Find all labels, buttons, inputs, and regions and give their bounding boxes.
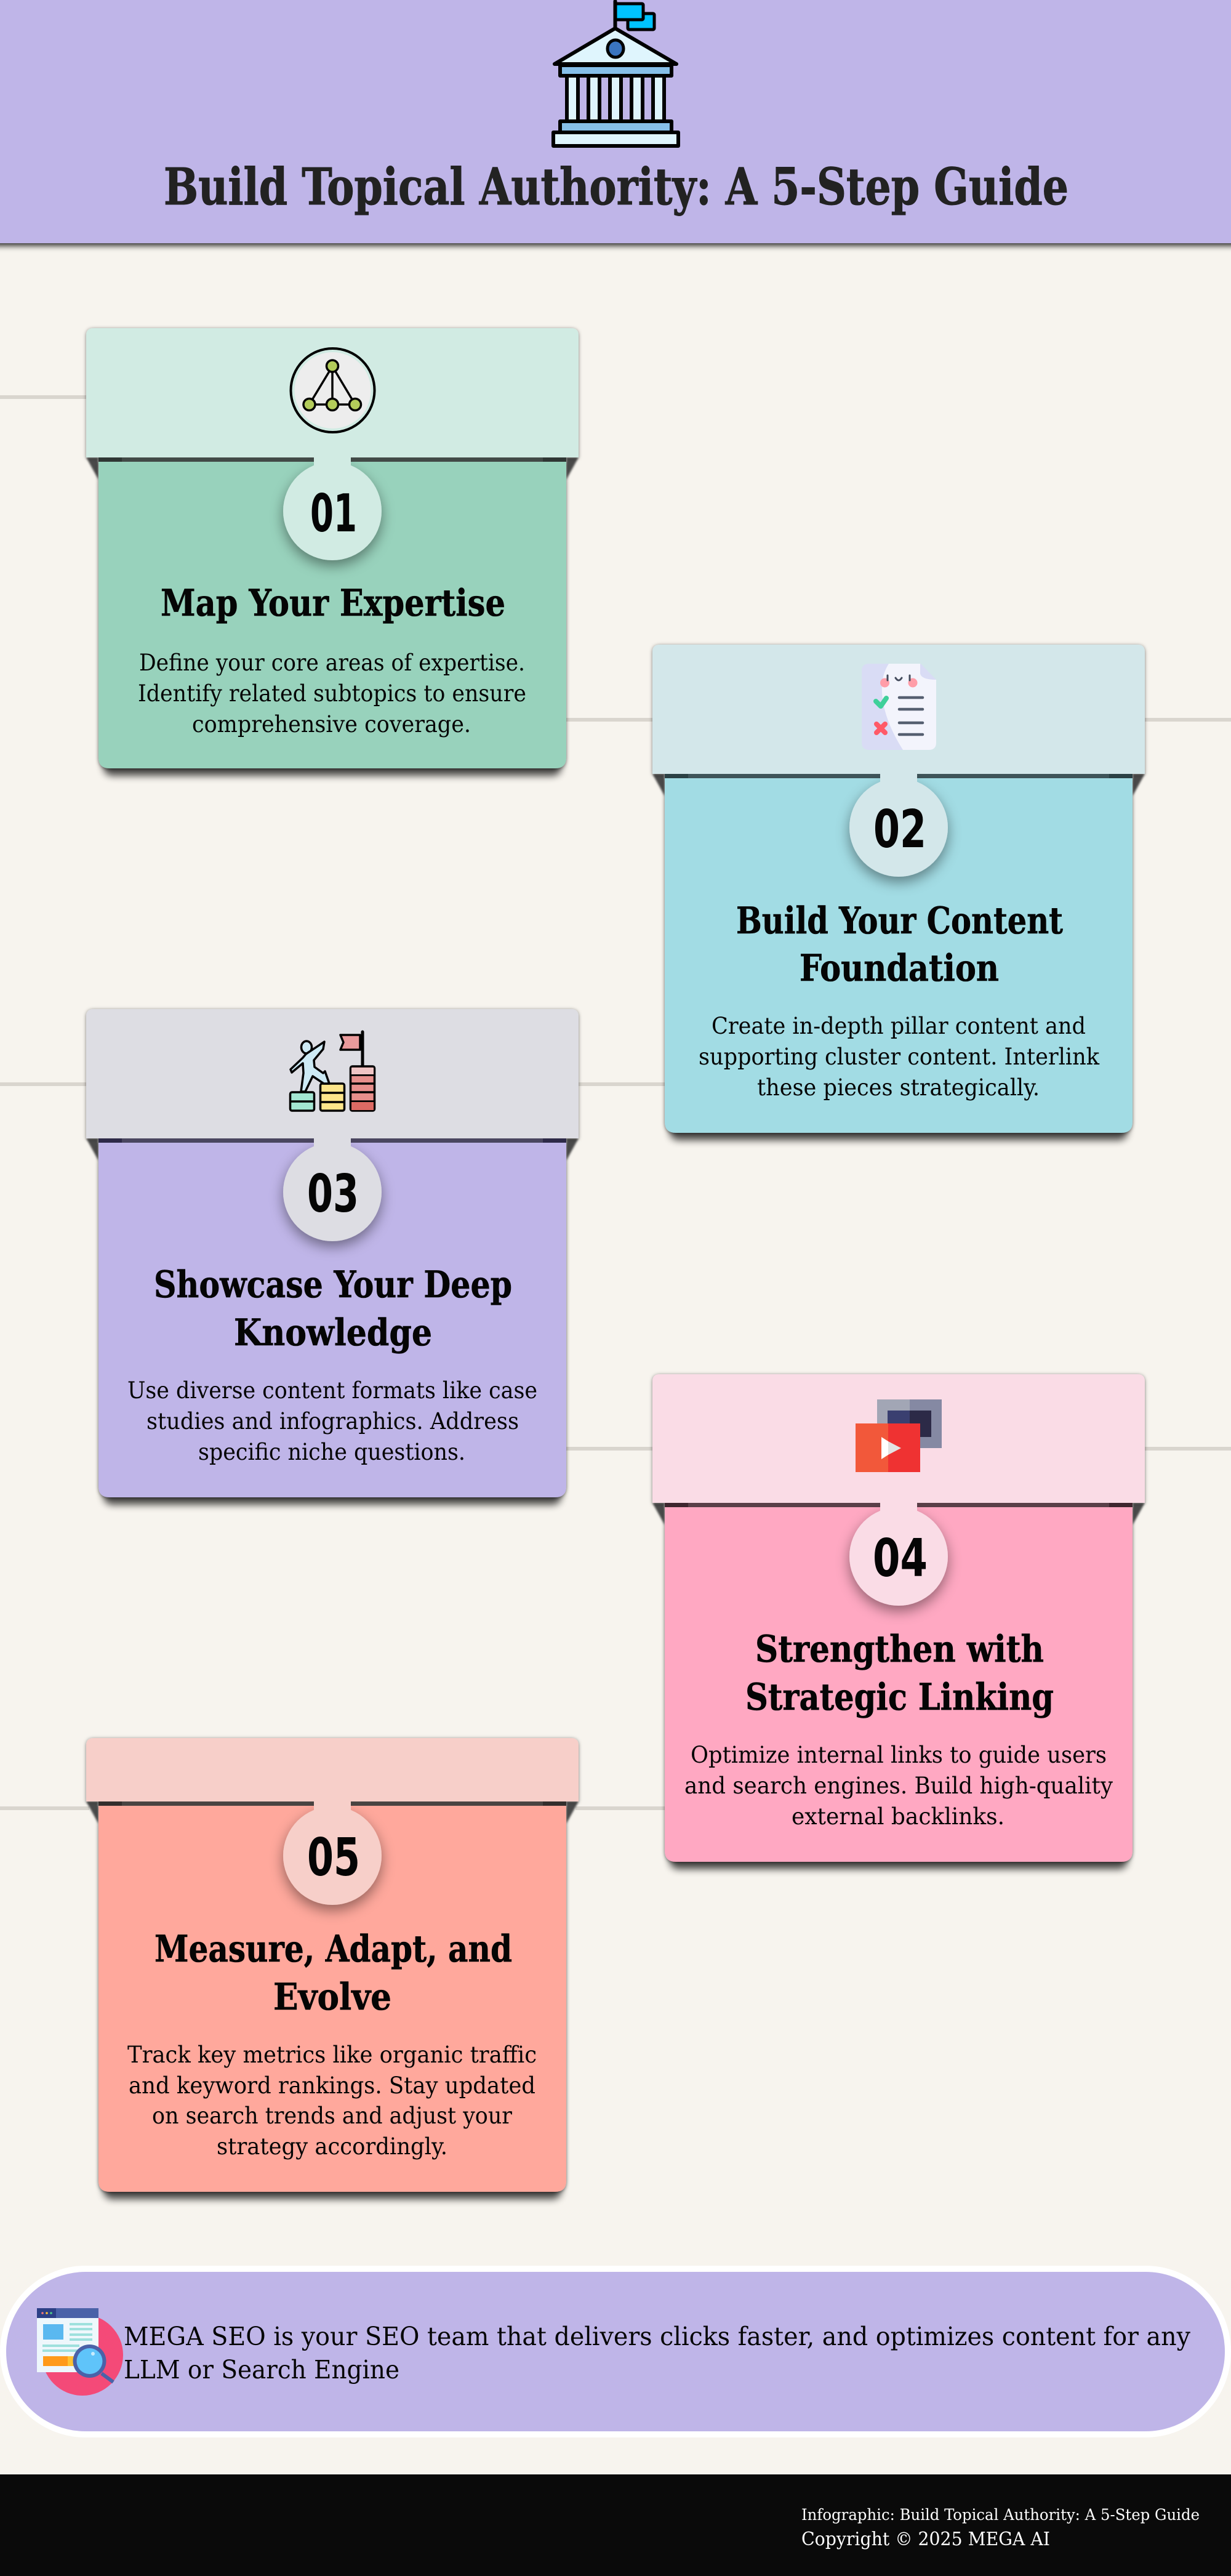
number badge 05: 05 bbox=[307, 1827, 360, 1888]
step 04 description: external backlinks. bbox=[792, 1803, 1004, 1830]
icon: network nodes bbox=[291, 348, 374, 432]
footer caption: Infographic: Build Topical Authority: A 5-Step Guide bbox=[801, 2506, 1200, 2524]
step 02 description bbox=[699, 1013, 1100, 1101]
panel: step 01 bbox=[86, 328, 579, 776]
step 05 description: on search trends and adjust your bbox=[152, 2103, 512, 2129]
title: Build Topical Authority: A 5-Step Guide bbox=[164, 158, 1069, 217]
step 04 header tab bbox=[652, 1374, 1145, 1503]
step 04 description: and search engines. Build high-quality bbox=[684, 1773, 1113, 1799]
icon: web page with magnifier bbox=[37, 2308, 123, 2396]
panel: step 02 bbox=[652, 645, 1145, 1140]
icon: checklist document bbox=[862, 664, 936, 750]
step 04 body bbox=[665, 1507, 1133, 1862]
step 05 description: strategy accordingly. bbox=[217, 2133, 447, 2160]
panel: step 04 bbox=[652, 1374, 1145, 1869]
step 03 body bbox=[98, 1143, 566, 1497]
step 04 heading bbox=[745, 1628, 1054, 1719]
number badge 04 bbox=[849, 1498, 948, 1606]
step 01 description: comprehensive coverage. bbox=[192, 711, 471, 738]
footer bar bbox=[0, 2474, 1231, 2576]
step 01 description bbox=[138, 650, 526, 738]
step 02 header tab bbox=[652, 645, 1145, 774]
call to action banner bbox=[3, 2269, 1228, 2434]
icon: video play cards bbox=[856, 1399, 942, 1472]
panel: step 03 bbox=[86, 1009, 579, 1505]
call to action text: MEGA SEO is your SEO team that delivers clicks faster, and optimizes content for any bbox=[124, 2322, 1190, 2351]
number badge 04: 04 bbox=[873, 1528, 928, 1589]
step 03 heading: Showcase Your Deep bbox=[154, 1263, 512, 1306]
header banner bbox=[0, 0, 1231, 243]
step 03 description: Use diverse content formats like case bbox=[127, 1377, 537, 1404]
step 05 description bbox=[127, 2042, 537, 2160]
icon: climbing figure with flag bbox=[291, 1032, 374, 1111]
copyright: Copyright © 2025 MEGA AI bbox=[801, 2529, 1050, 2550]
step 03 description: studies and infographics. Address bbox=[146, 1408, 519, 1435]
step 05 heading bbox=[154, 1928, 512, 2019]
step 02 body bbox=[665, 778, 1133, 1133]
step 04 description bbox=[684, 1742, 1113, 1830]
step 05 body bbox=[98, 1806, 566, 2192]
step 04 description: Optimize internal links to guide users bbox=[691, 1742, 1107, 1768]
step 01 description: Define your core areas of expertise. bbox=[139, 650, 525, 676]
step 05 heading: Evolve bbox=[273, 1976, 391, 2019]
panel: step 05 bbox=[86, 1738, 579, 2199]
step 04 heading: Strategic Linking bbox=[745, 1676, 1054, 1719]
step 03 heading: Knowledge bbox=[234, 1311, 432, 1354]
step 02 description: Create in-depth pillar content and bbox=[712, 1013, 1086, 1039]
step 03 description bbox=[127, 1377, 537, 1465]
step 05 header tab bbox=[86, 1738, 579, 1801]
step 01 body bbox=[98, 462, 566, 768]
step 03 description: specific niche questions. bbox=[198, 1439, 465, 1465]
number badge 03: 03 bbox=[307, 1164, 359, 1225]
step 01 heading: Map Your Expertise bbox=[161, 582, 505, 625]
step 02 heading bbox=[736, 900, 1063, 990]
step 05 heading: Measure, Adapt, and bbox=[154, 1928, 512, 1971]
call to action text bbox=[124, 2322, 1190, 2385]
step 05 description: Track key metrics like organic traffic bbox=[127, 2042, 537, 2068]
step 01 description: Identify related subtopics to ensure bbox=[138, 680, 526, 707]
number badge 03 bbox=[283, 1133, 382, 1241]
step 02 description: these pieces strategically. bbox=[757, 1074, 1040, 1101]
number badge 01: 01 bbox=[310, 483, 357, 544]
step 01 header tab bbox=[86, 328, 579, 457]
call to action text: LLM or Search Engine bbox=[124, 2355, 399, 2385]
step 02 heading: Foundation bbox=[800, 947, 999, 990]
number badge 05 bbox=[283, 1797, 382, 1905]
step 02 heading: Build Your Content bbox=[736, 900, 1063, 943]
timeline connector lines bbox=[0, 395, 1231, 1810]
icon: courthouse building with flags bbox=[553, 1, 678, 146]
step 03 header tab bbox=[86, 1009, 579, 1138]
step 03 heading bbox=[154, 1263, 512, 1354]
step 05 description: and keyword rankings. Stay updated bbox=[129, 2072, 535, 2099]
number badge 02 bbox=[849, 769, 948, 877]
number badge 02: 02 bbox=[873, 799, 926, 860]
step 04 heading: Strengthen with bbox=[755, 1628, 1044, 1671]
step 02 description: supporting cluster content. Interlink bbox=[699, 1044, 1100, 1070]
number badge 01 bbox=[283, 453, 382, 560]
